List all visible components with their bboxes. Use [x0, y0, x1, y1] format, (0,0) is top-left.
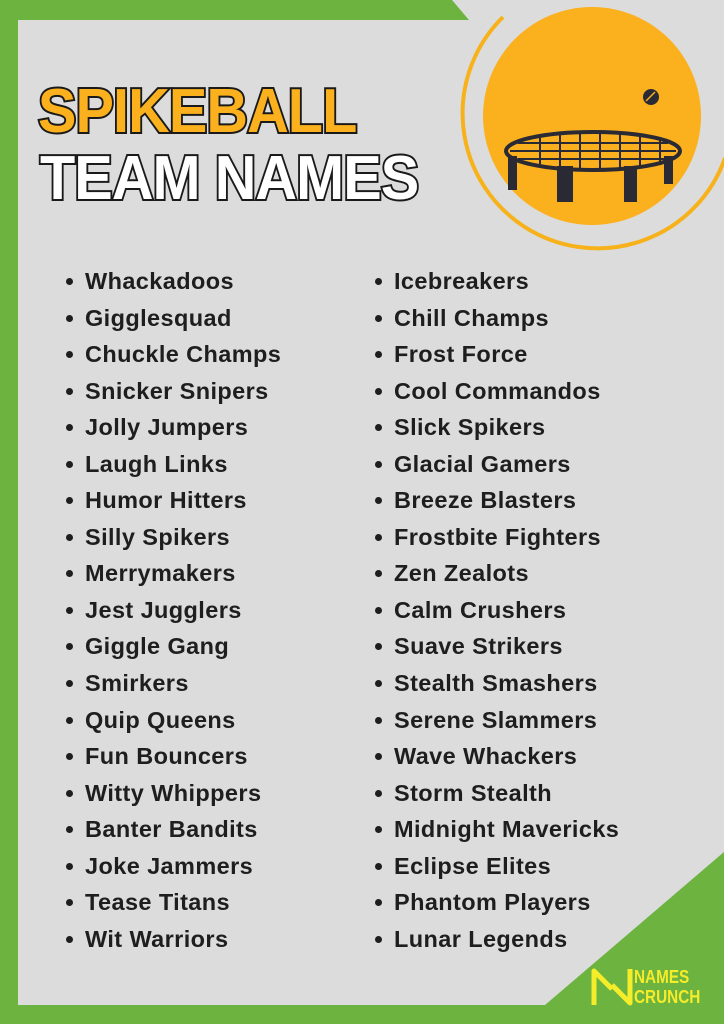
list: column 2: Slick Spikers [394, 414, 546, 440]
list: column 2: Lunar Legends [394, 926, 568, 952]
list: column 2: Eclipse Elites [394, 853, 551, 879]
list: column 2: Suave Strikers [394, 633, 563, 659]
list: column 2: Phantom Players [394, 889, 591, 915]
list: column 1: Joke Jammers [85, 853, 253, 879]
list: column 1: Chuckle Champs [85, 341, 281, 367]
list: column 1: Jest Jugglers [85, 597, 242, 623]
logo: names crunch [592, 967, 700, 1007]
list: column 2: Frost Force [394, 341, 528, 367]
list: column 1: Humor Hitters [85, 487, 247, 513]
list: column 1: Merrymakers [85, 560, 236, 586]
list: column 2: Glacial Gamers [394, 451, 571, 477]
list: column 1: Banter Bandits [85, 816, 258, 842]
list: column 2: Breeze Blasters [394, 487, 576, 513]
list: column 1: Snicker Snipers [85, 378, 269, 404]
title: team names: TEAM NAMES [40, 144, 418, 213]
list: column 2: Serene Slammers [394, 707, 597, 733]
list: column 2: Storm Stealth [394, 780, 552, 806]
list: column 1: Tease Titans [85, 889, 230, 915]
logo: names crunch: NAMES [634, 967, 689, 987]
list: column 1: Fun Bouncers [85, 743, 248, 769]
logo: names crunch: CRUNCH [634, 987, 700, 1007]
list: column 1: Quip Queens [85, 707, 236, 733]
list: column 2: Calm Crushers [394, 597, 566, 623]
list: column 2: Stealth Smashers [394, 670, 598, 696]
title: spikeball: SPIKEBALL [38, 77, 356, 146]
list: column 2: Icebreakers [394, 268, 529, 294]
list: column 2: Zen Zealots [394, 560, 529, 586]
list: column 1 [66, 268, 281, 952]
list: column 2 [375, 268, 619, 952]
list: column 1: Wit Warriors [85, 926, 228, 952]
list: column 1: Laugh Links [85, 451, 228, 477]
icon: spikeball [463, 7, 724, 248]
list: column 1: Jolly Jumpers [85, 414, 248, 440]
list: column 1: Whackadoos [85, 268, 234, 294]
list: column 1: Gigglesquad [85, 305, 232, 331]
list: column 1: Witty Whippers [85, 780, 261, 806]
list: column 2: Midnight Mavericks [394, 816, 619, 842]
list: column 2: Frostbite Fighters [394, 524, 601, 550]
list: column 2: Wave Whackers [394, 743, 577, 769]
list: column 2: Chill Champs [394, 305, 549, 331]
list: column 1: Giggle Gang [85, 633, 229, 659]
list: column 1: Smirkers [85, 670, 189, 696]
list: column 2: Cool Commandos [394, 378, 601, 404]
list: column 1: Silly Spikers [85, 524, 230, 550]
